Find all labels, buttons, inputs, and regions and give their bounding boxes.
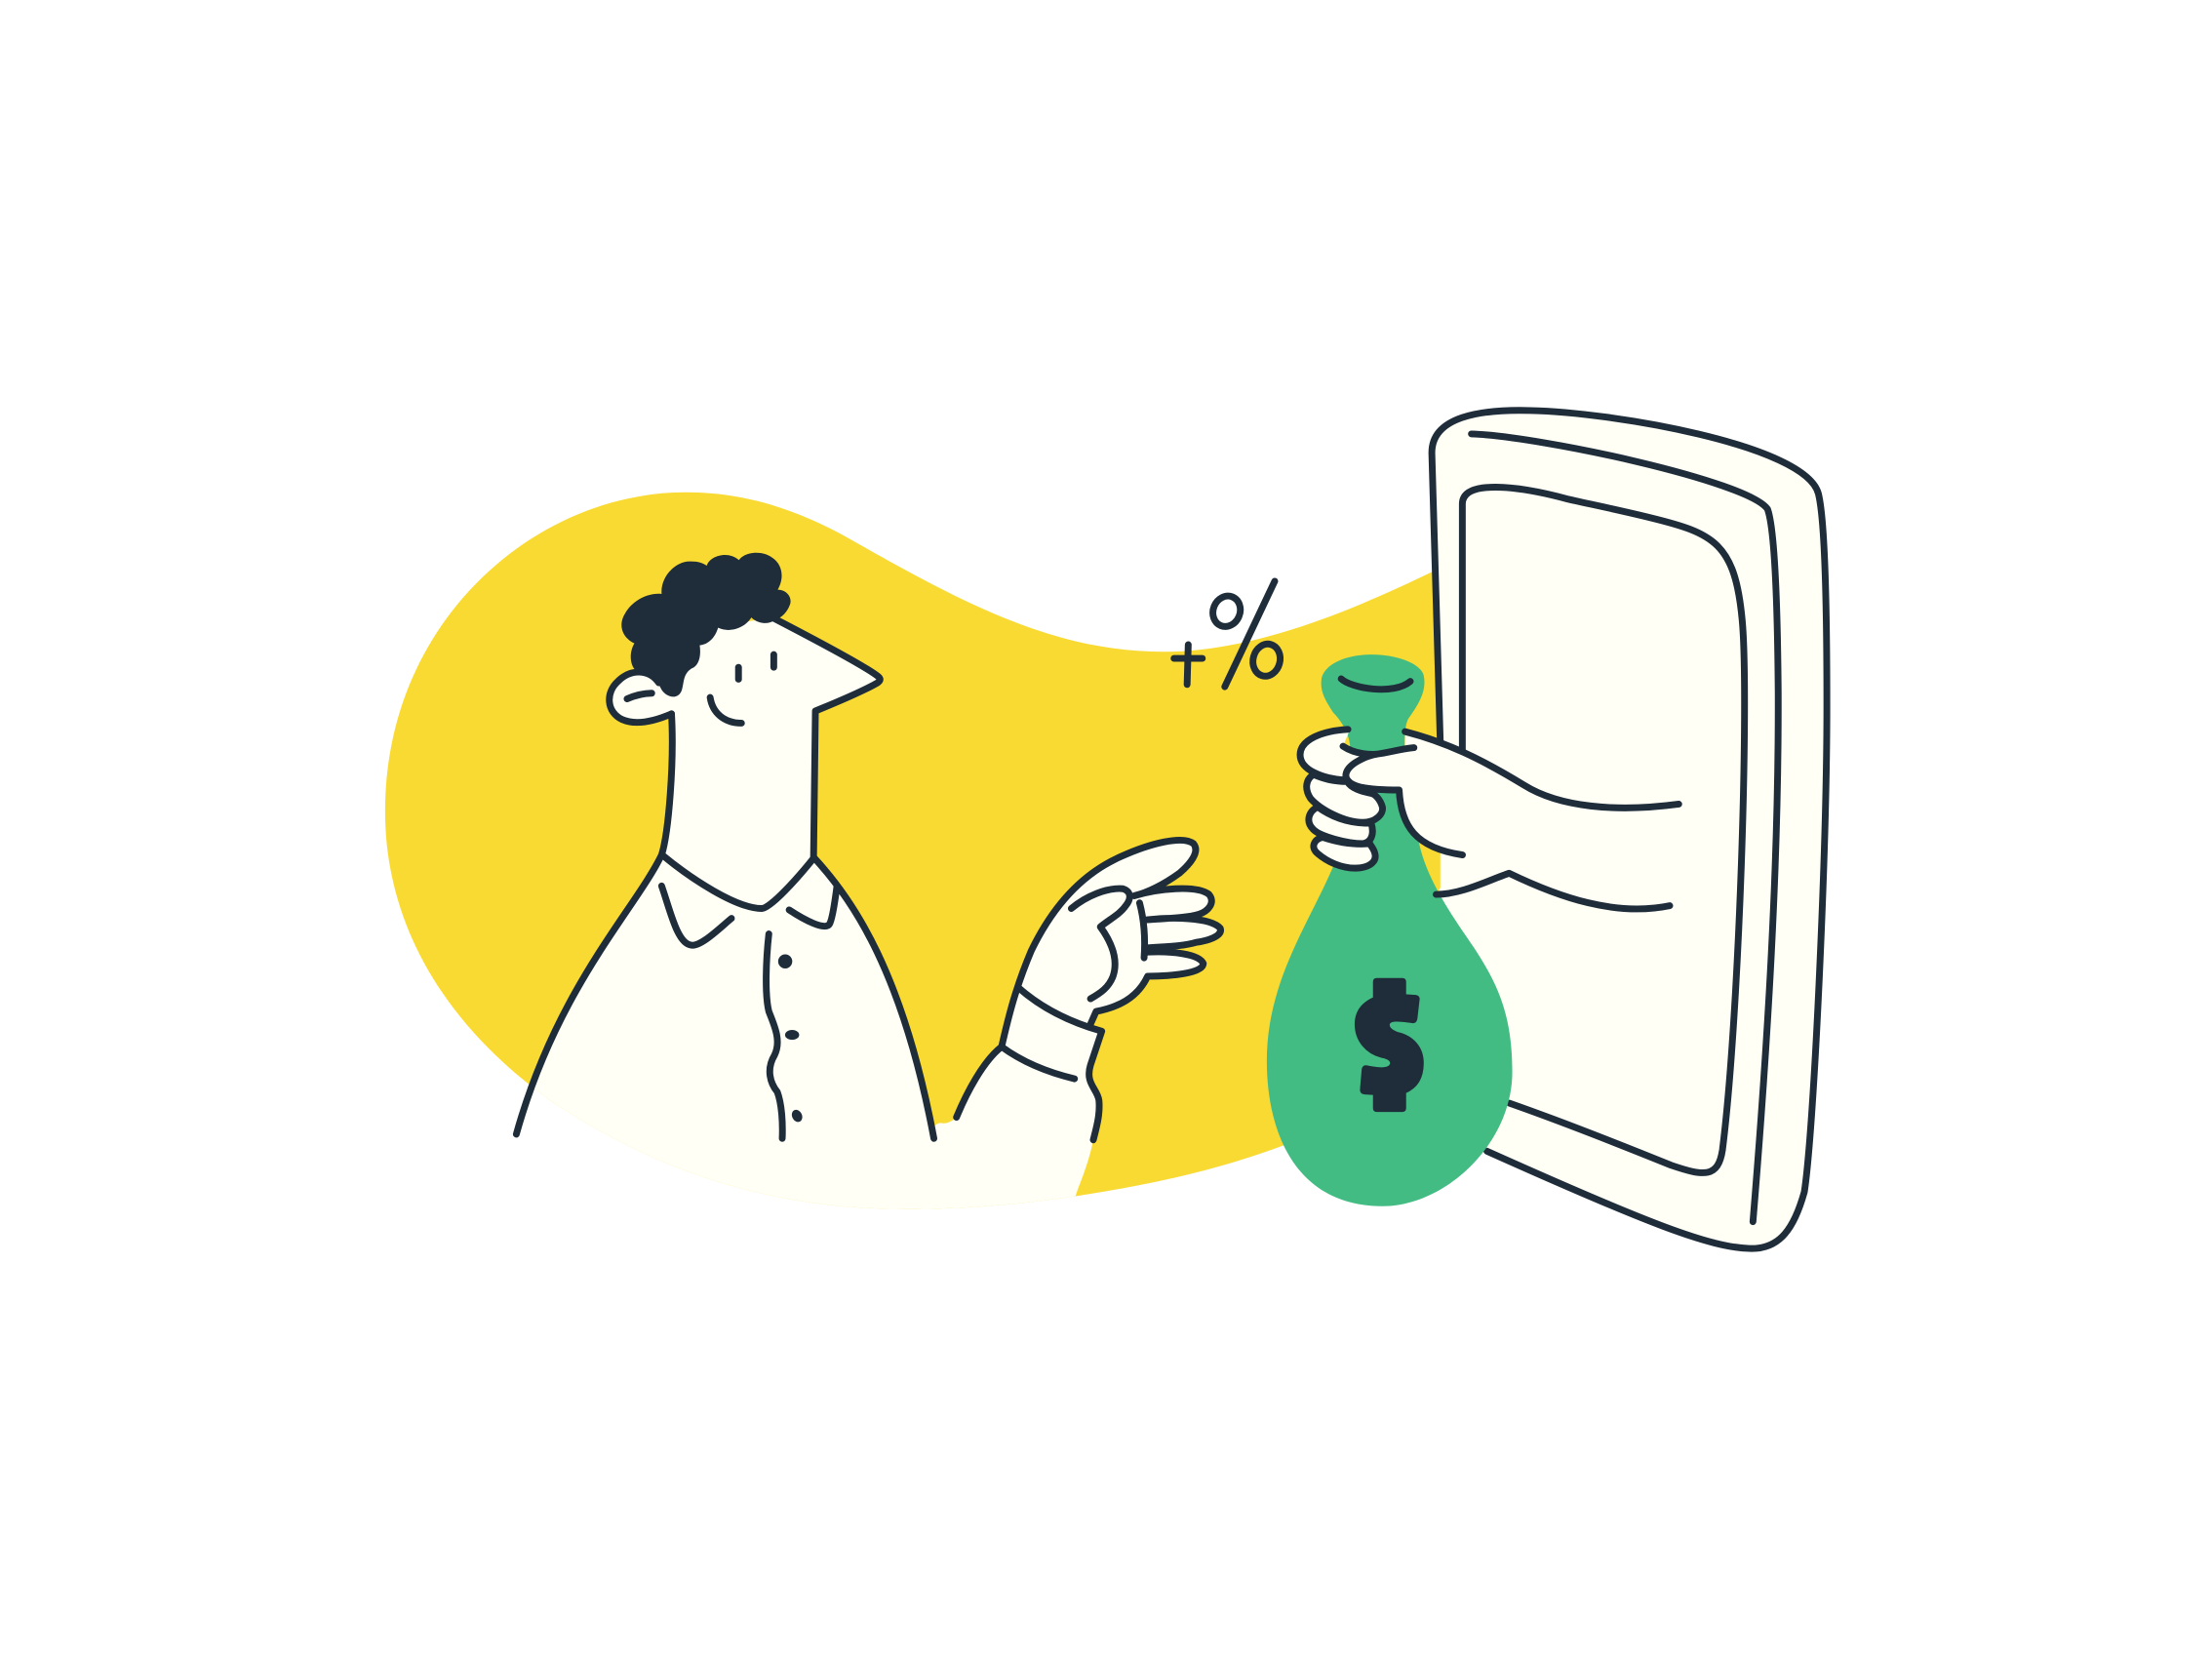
face and neck outline xyxy=(661,618,880,857)
hair xyxy=(621,553,791,696)
plus percent symbol xyxy=(1174,581,1284,687)
shirt buttons xyxy=(778,955,805,1124)
phone screen xyxy=(1462,488,1745,1172)
phone outer outline xyxy=(1432,411,1827,1248)
fourth finger xyxy=(1314,837,1375,868)
third finger xyxy=(1309,807,1372,844)
phone inner edge xyxy=(1472,434,1778,1222)
ear xyxy=(610,672,671,723)
dollar sign xyxy=(1356,979,1423,1111)
yellow background blob xyxy=(385,493,1495,1209)
man's raised hand and sleeve xyxy=(957,840,1220,1140)
phone xyxy=(1432,411,1827,1248)
phone body fill xyxy=(1432,411,1827,1248)
man body fill xyxy=(534,620,1098,1209)
bag body xyxy=(1267,654,1513,1206)
shirt outline and collar xyxy=(516,855,934,1138)
money bag xyxy=(1267,654,1513,1206)
bag opening xyxy=(1341,679,1410,690)
top finger xyxy=(1300,730,1375,783)
thumb and arm outline xyxy=(1343,746,1414,754)
man character xyxy=(516,553,1220,1270)
phone hand holding the bag xyxy=(1300,730,1679,909)
arm fill xyxy=(1346,731,1679,909)
second finger xyxy=(1307,774,1383,822)
